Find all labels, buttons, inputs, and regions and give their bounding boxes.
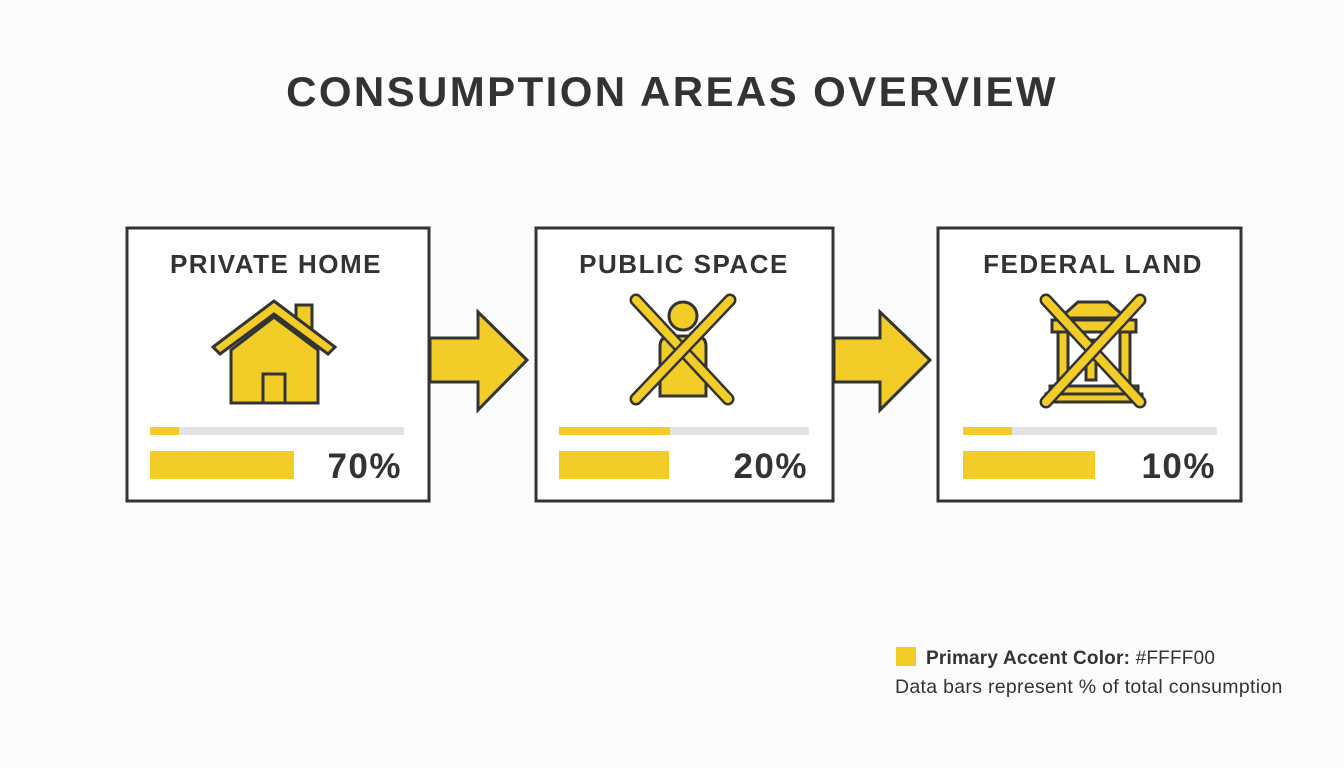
legend label: Primary Accent Color: #FFFF00 (926, 648, 1215, 669)
bar: thin progress 20 (559, 427, 809, 435)
panel: private home (127, 228, 429, 501)
icon: house (213, 301, 335, 403)
legend (895, 647, 1283, 698)
title: CONSUMPTION AREAS OVERVIEW (286, 68, 1058, 115)
arrow 2 (834, 312, 930, 410)
arrow 1 (430, 312, 527, 410)
value: 20%: 20% (733, 447, 808, 486)
bar: data 70 (150, 451, 294, 479)
panel: federal land (938, 228, 1241, 501)
bar: data 10 (963, 451, 1095, 479)
bar: thin progress 70 (150, 427, 404, 435)
legend note: Data bars represent % of total consumption (895, 676, 1283, 698)
icon: crossed person (636, 300, 730, 399)
legend swatch (896, 647, 916, 666)
heading: public space: PUBLIC SPACE (579, 249, 789, 279)
bar: data 20 (559, 451, 669, 479)
heading: federal land: FEDERAL LAND (983, 249, 1203, 279)
heading: private home: PRIVATE HOME (170, 249, 382, 279)
value: 10%: 10% (1141, 447, 1216, 486)
bar: thin progress 10 (963, 427, 1217, 435)
icon: crossed government building (1046, 300, 1142, 402)
panel: public space (536, 228, 833, 501)
value: 70%: 70% (327, 447, 402, 486)
